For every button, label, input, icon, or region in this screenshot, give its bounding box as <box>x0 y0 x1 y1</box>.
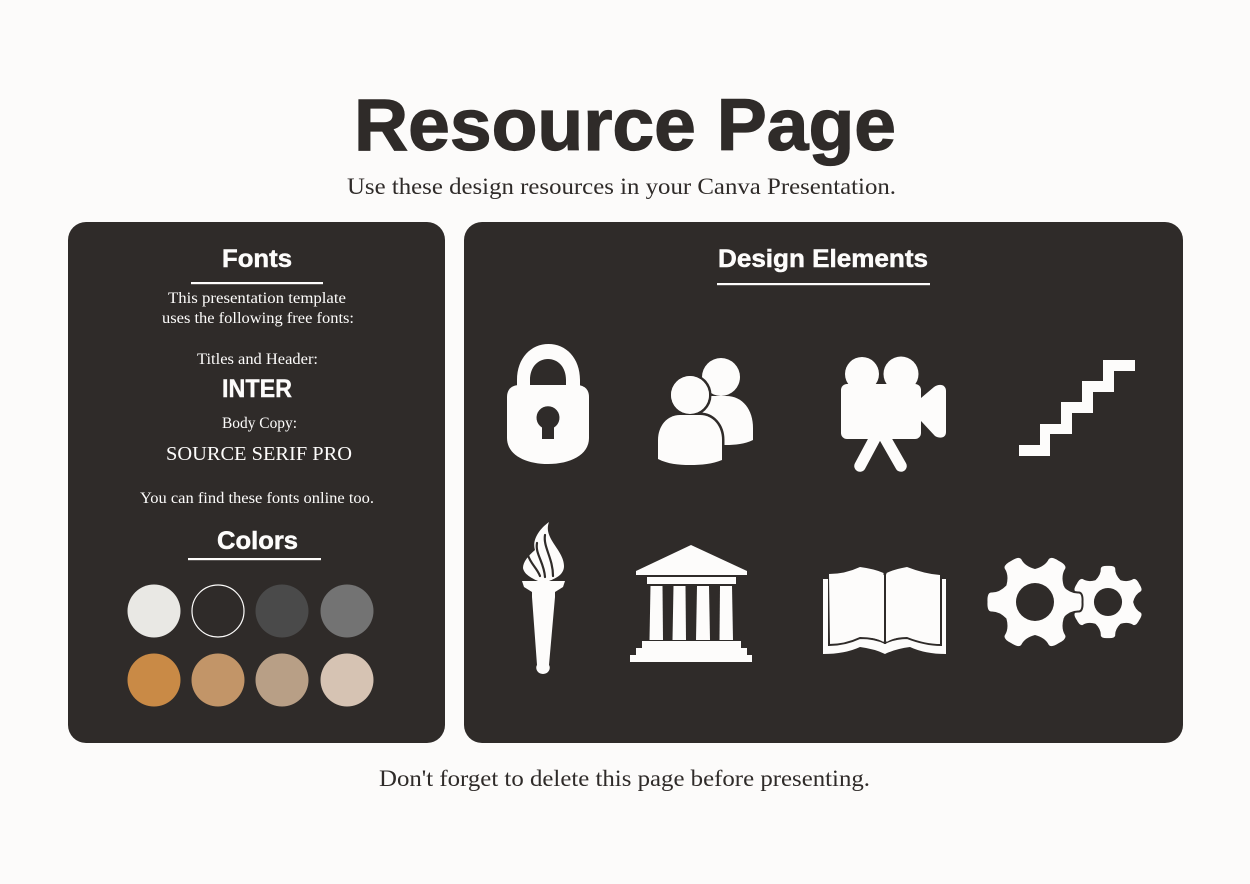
footer note: Don't forget to delete this page before presenting. <box>379 766 870 792</box>
heading: design elements: Design Elements <box>718 245 928 273</box>
heading: fonts: Fonts <box>222 245 292 273</box>
text: body copy label: Body Copy: <box>222 415 297 432</box>
panel: design elements <box>464 222 1183 743</box>
icon: film camera <box>841 356 946 466</box>
icon: users <box>650 358 753 471</box>
heading: colors <box>188 527 321 560</box>
text: titles and header label: Titles and Header: <box>197 351 318 368</box>
text: find fonts note: You can find these fonts online too. <box>140 490 374 507</box>
text: font intro <box>162 290 354 327</box>
subtitle: Use these design resources in your Canva Presentation. <box>347 174 896 200</box>
title: Resource Page <box>354 85 896 166</box>
icon: open book <box>823 567 946 654</box>
panel: fonts and colors <box>68 222 445 743</box>
icon: stairs <box>1019 360 1135 456</box>
text: source serif pro font name: SOURCE SERIF PRO <box>166 443 352 465</box>
text: font intro: This presentation template <box>168 290 346 307</box>
icon: padlock <box>507 344 589 464</box>
heading: fonts <box>191 245 323 284</box>
text: inter font name: INTER <box>222 375 292 403</box>
small gear <box>1070 566 1146 638</box>
icon: gears <box>987 553 1146 651</box>
large gear <box>987 553 1083 651</box>
color swatches <box>128 584 374 706</box>
heading: colors: Colors <box>217 527 298 555</box>
text: font intro: uses the following free fonts: <box>162 310 354 327</box>
icon: torch <box>522 522 565 674</box>
icon: classical building <box>630 545 752 662</box>
